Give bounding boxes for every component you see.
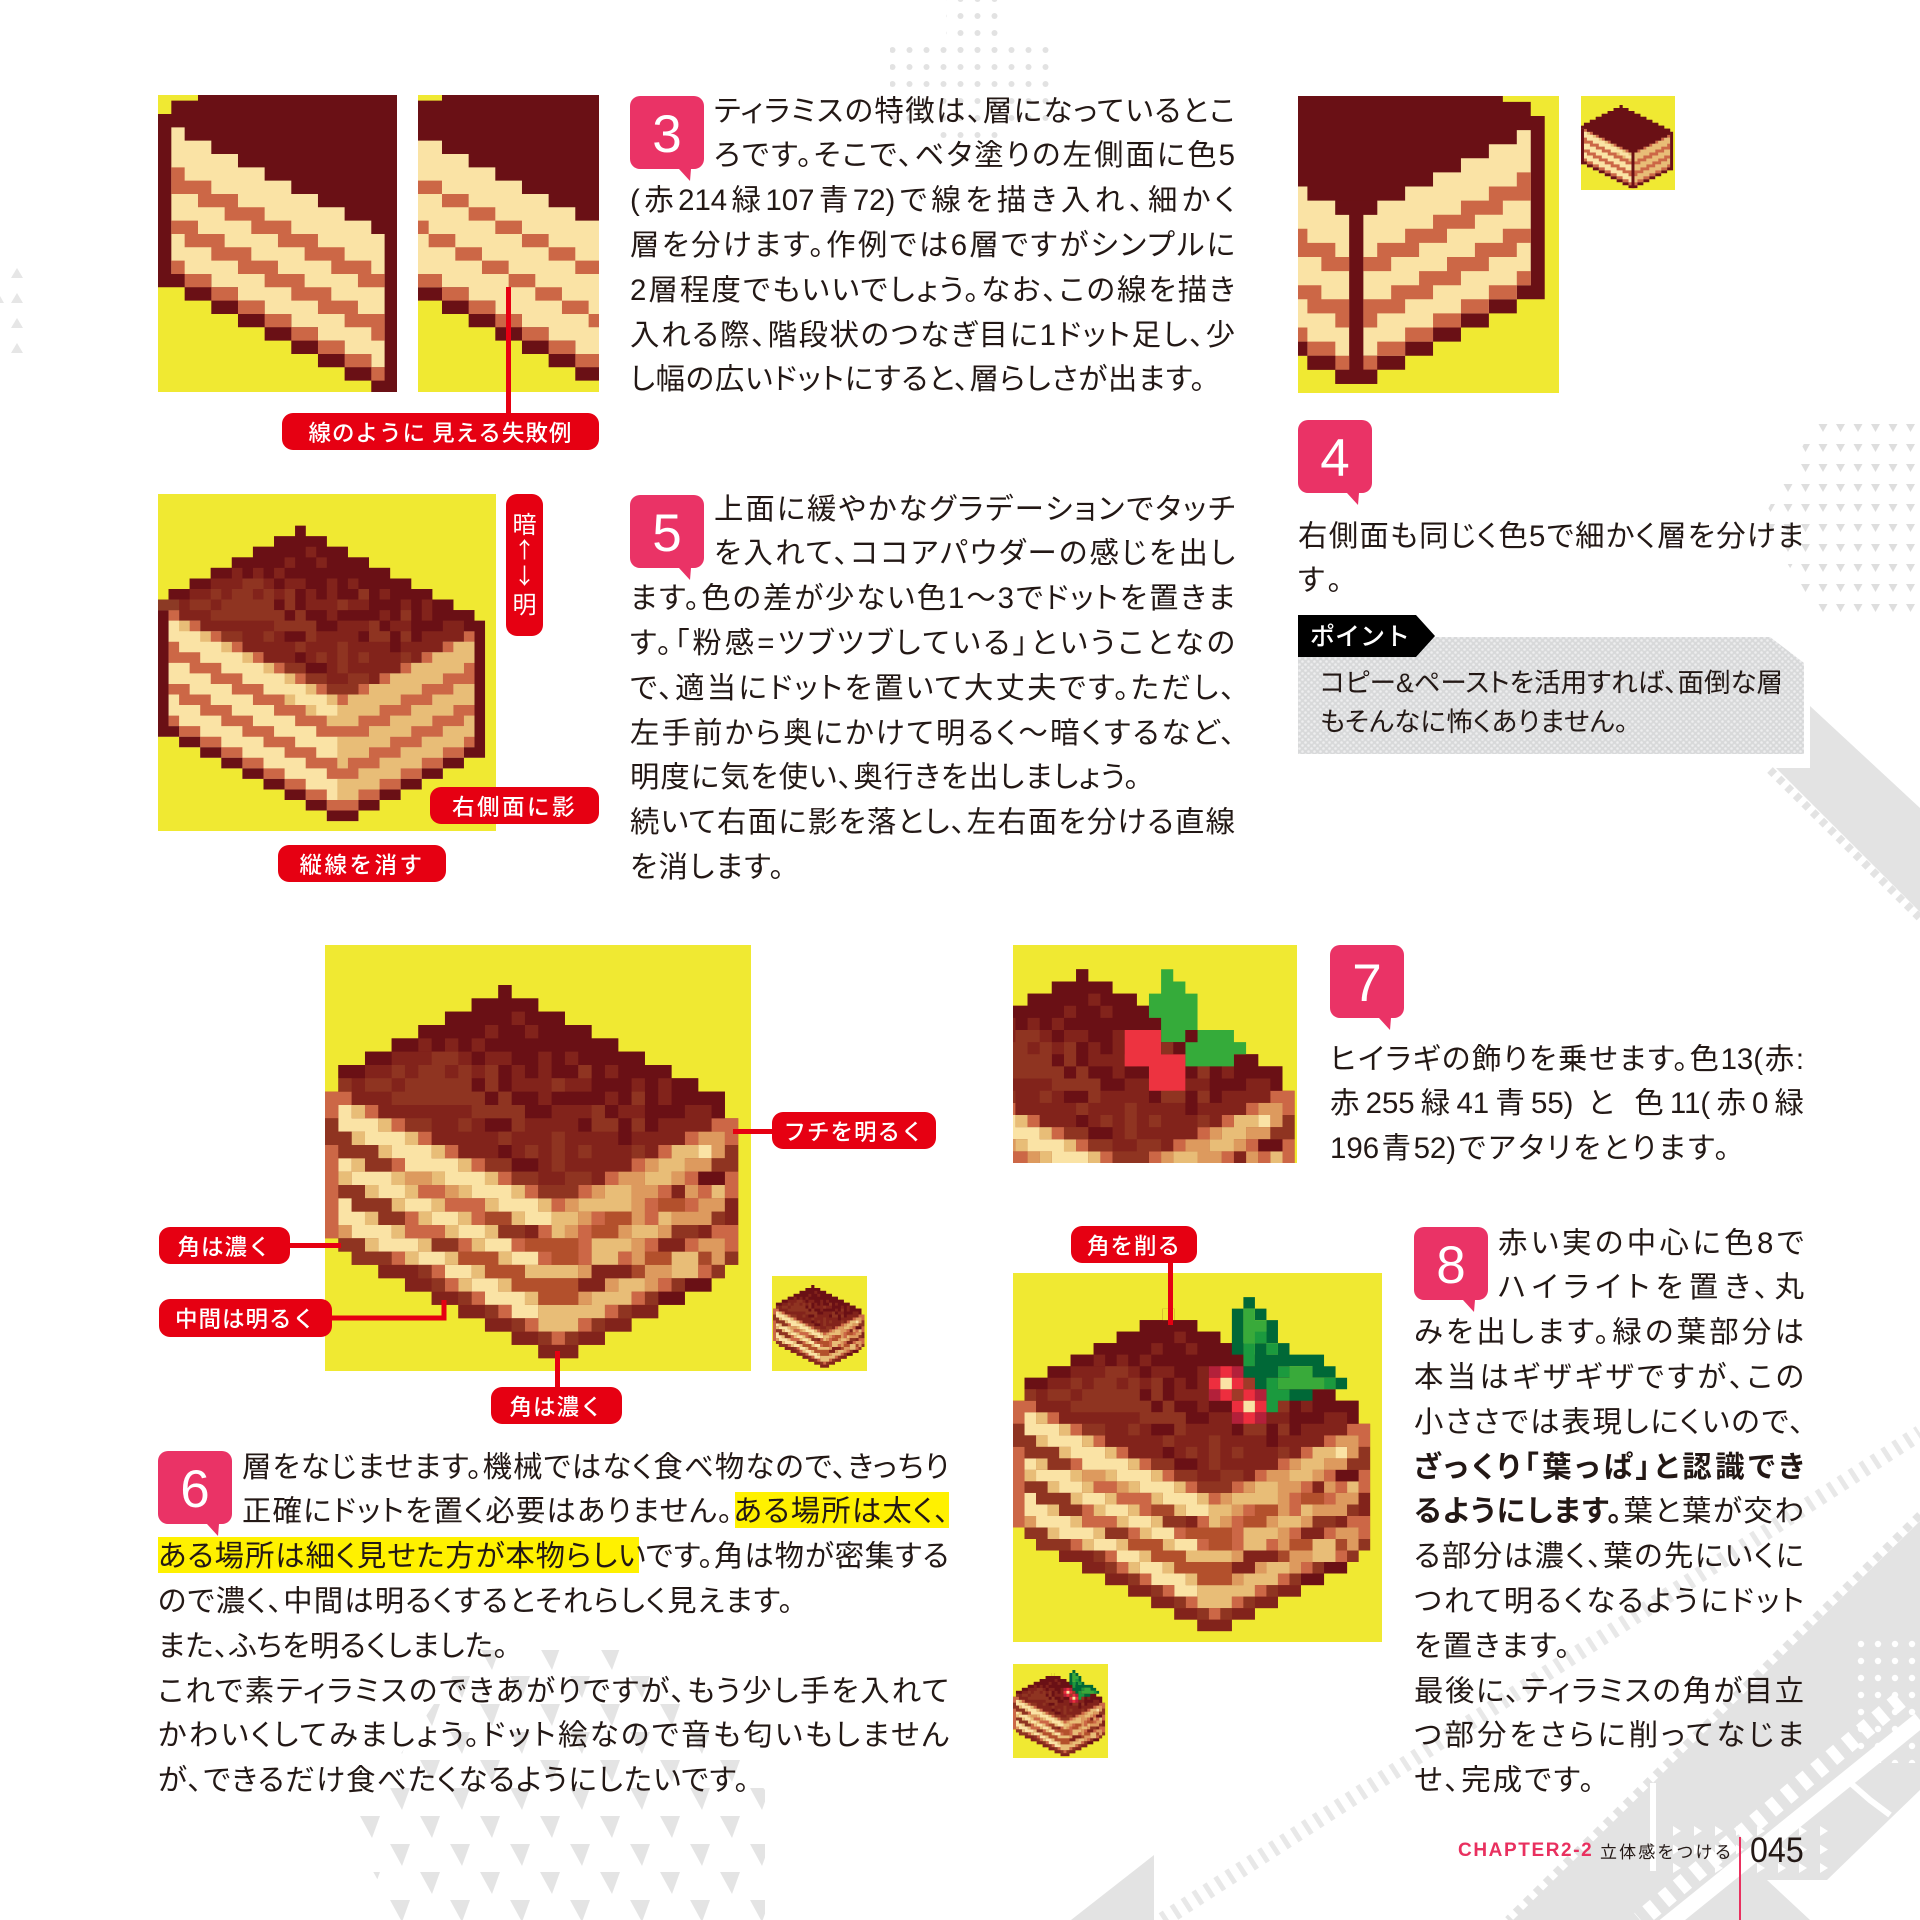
text: step 8: るようにします。葉と葉が交わ <box>1414 1495 1804 1528</box>
text: step 8: つれて明るくなるようにドット <box>1414 1585 1804 1618</box>
pixel art: step 5 cake <box>158 494 496 831</box>
text: step 7 <box>1330 1042 1804 1165</box>
badge: step 3 <box>630 96 704 181</box>
label: failed example: 線のように 見える失敗例 <box>309 416 572 448</box>
pixel art: step 3 left layered side <box>158 95 397 392</box>
text: step 3 <box>630 94 1235 396</box>
leader line: cut corner <box>1168 1262 1173 1325</box>
text: step 5: を消します。 <box>630 851 784 884</box>
label: cut corner: 角を削る <box>1087 1228 1181 1260</box>
badge: step 4: 4 <box>1320 429 1350 488</box>
badge: step 3: 3 <box>652 105 682 164</box>
text: step 8: 本当はギザギザですが、この <box>1414 1361 1804 1394</box>
label: dark corner bottom <box>491 1387 622 1424</box>
label: erase vertical line <box>278 845 446 882</box>
label: erase vertical line: 縦線を消す <box>299 848 424 880</box>
badge: step 5: 5 <box>652 504 682 563</box>
text: step 3: ティラミスの特徴は、層になっているとこ <box>714 94 1235 128</box>
badge: step 5 <box>630 495 704 580</box>
text: step 5: 続いて右面に影を落とし、左右面を分ける直線 <box>630 806 1235 839</box>
text: step 3: し幅の広いドットにすると、層らしさが出ます。 <box>630 363 1205 396</box>
text: step 8: ざっくり「葉っぱ」と認識でき <box>1414 1450 1804 1484</box>
footer: chapter title and page number <box>1458 1831 1804 1920</box>
badge: step 8 <box>1414 1227 1488 1312</box>
leader line: dark corner bottom <box>555 1351 560 1388</box>
text: step 3: ろです。そこで、ベタ塗りの左側面に色5 <box>714 139 1235 172</box>
pixel art: step 3 failed example <box>418 95 599 392</box>
text: step 6 with highlights: 層をなじませます。機械ではなく食べ物なので、きっちり <box>242 1450 949 1484</box>
badge: step 7 <box>1330 945 1404 1030</box>
badge: step 6 <box>158 1451 232 1536</box>
label: shadow on right face <box>430 787 599 824</box>
text: step 7: 赤255緑41青55) と 色11(赤0緑 <box>1330 1087 1804 1120</box>
text: step 3: 層を分けます。作例では6層ですがシンプルに <box>630 229 1235 262</box>
text: step 8: る部分は濃く、葉の先にいくに <box>1414 1540 1804 1573</box>
mini cake: step 8 <box>1013 1664 1108 1758</box>
label: dark to light <box>506 494 543 636</box>
text: step 6 with highlights: 正確にドットを置く必要はありません。ある場所は太く、 <box>242 1495 949 1528</box>
text: step 5: 上面に緩やかなグラデーションでタッチ <box>714 492 1235 526</box>
text: step 5 <box>630 492 1235 884</box>
text: step 5: を入れて、ココアパウダーの感じを出し <box>714 537 1235 570</box>
text: step 4: 右側面も同じく色5で細かく層を分けま <box>1298 520 1804 552</box>
text: step 5: 明度に気を使い、奥行きを出しましょう。 <box>630 761 1139 794</box>
badge: step 7: 7 <box>1352 954 1382 1013</box>
text: step 8: 最後に、ティラミスの角が目立 <box>1414 1674 1804 1708</box>
label: dark to light: ↑ <box>513 533 536 565</box>
badge: step 6: 6 <box>180 1460 210 1519</box>
leader line: failed example <box>506 287 510 415</box>
footer: chapter title and page number: 立体感をつける <box>1600 1838 1734 1863</box>
leader line: brighter middle <box>332 1300 446 1320</box>
label: cut corner <box>1071 1226 1197 1263</box>
text: step 5: ます。色の差が少ない色1〜3でドットを置きま <box>630 582 1235 615</box>
text: step 8: を置きます。 <box>1414 1630 1570 1663</box>
text: step 6 with highlights: ので濃く、中間は明るくするとそれらしく見えます。 <box>158 1585 793 1618</box>
pixel art: step 4 right side layered <box>1298 96 1559 393</box>
point callout panel: コピー&ペーストを活用すれば、面倒な層 <box>1320 668 1783 698</box>
text: step 4: す。 <box>1298 564 1342 597</box>
text: step 3: 2層程度でもいいでしょう。なお、この線を描き <box>630 274 1235 307</box>
label: dark corner left: 角は濃く <box>177 1230 272 1262</box>
text: step 6 with highlights <box>158 1450 949 1797</box>
text: step 8: せ、完成です。 <box>1414 1764 1594 1797</box>
badge: step 4 <box>1298 420 1372 505</box>
label: dark corner bottom: 角は濃く <box>509 1390 604 1422</box>
leader line: brighten edge <box>733 1129 773 1134</box>
text: step 5: 左手前から奥にかけて明るく〜暗くするなど、 <box>630 716 1235 750</box>
label: dark to light: ↓ <box>513 559 536 591</box>
text: step 8: 赤い実の中心に色8で <box>1498 1226 1804 1260</box>
label: dark corner left <box>159 1227 290 1264</box>
text: step 5: で、適当にドットを置いて大丈夫です。ただし、 <box>630 672 1235 705</box>
text: step 6 with highlights: が、できるだけ食べたくなるようにしたいです。 <box>158 1764 749 1797</box>
mini cake: step 4 <box>1581 96 1675 190</box>
text: step 6 with highlights: かわいくしてみましょう。ドット絵なので音も匂いもしません <box>158 1719 949 1752</box>
label: brighter middle: 中間は明るく <box>175 1302 316 1334</box>
pixel art: step 8 finished cake <box>1013 1273 1382 1642</box>
text: step 7: 196青52)でアタリをとります。 <box>1330 1132 1729 1165</box>
text: step 4 <box>1298 520 1804 597</box>
text: step 8 <box>1414 1226 1804 1797</box>
label: shadow on right face: 右側面に影 <box>452 790 577 822</box>
text: step 6 with highlights: ある場所は細く見せた方が本物らしいです。角は物が密集する <box>158 1540 949 1573</box>
footer: chapter title and page number: CHAPTER2-2 <box>1458 1840 1593 1861</box>
text: step 6 with highlights: また、ふちを明るくしました。 <box>158 1630 508 1663</box>
label: brighter middle <box>159 1299 332 1337</box>
text: step 8: 小ささでは表現しにくいので、 <box>1414 1406 1804 1439</box>
mini cake: step 6 <box>772 1276 867 1371</box>
badge: step 8: 8 <box>1436 1236 1466 1295</box>
label: brighten edge: フチを明るく <box>783 1114 924 1146</box>
text: step 8: つ部分をさらに削ってなじま <box>1414 1719 1804 1752</box>
label: dark to light: 明 <box>512 585 536 620</box>
point callout panel <box>1298 615 1804 754</box>
text: step 6 with highlights: これで素ティラミスのできあがりですが、もう少し手を入れて <box>158 1674 949 1708</box>
text: step 5: す。「粉感=ツブツブしている」ということなの <box>630 627 1235 660</box>
footer: chapter title and page number: 045 <box>1750 1831 1804 1870</box>
text: step 8: みを出します。緑の葉部分は <box>1414 1316 1804 1349</box>
pixel art: step 7 holly blocking <box>1013 945 1297 1163</box>
text: step 8: ハイライトを置き、丸 <box>1498 1271 1804 1304</box>
text: step 3: (赤214緑107青72)で線を描き入れ、細かく <box>630 184 1235 217</box>
label: dark to light: 暗 <box>512 505 536 540</box>
pixel art: step 6 cake <box>325 945 751 1371</box>
point callout panel: ポイント <box>1310 617 1410 653</box>
point callout panel: もそんなに怖くありません。 <box>1320 706 1628 736</box>
text: step 3: 入れる際、階段状のつなぎ目に1ドット足し、少 <box>630 318 1235 352</box>
leader line: dark corner left <box>288 1243 341 1248</box>
text: step 7: ヒイラギの飾りを乗せます。色13(赤: <box>1330 1042 1804 1076</box>
